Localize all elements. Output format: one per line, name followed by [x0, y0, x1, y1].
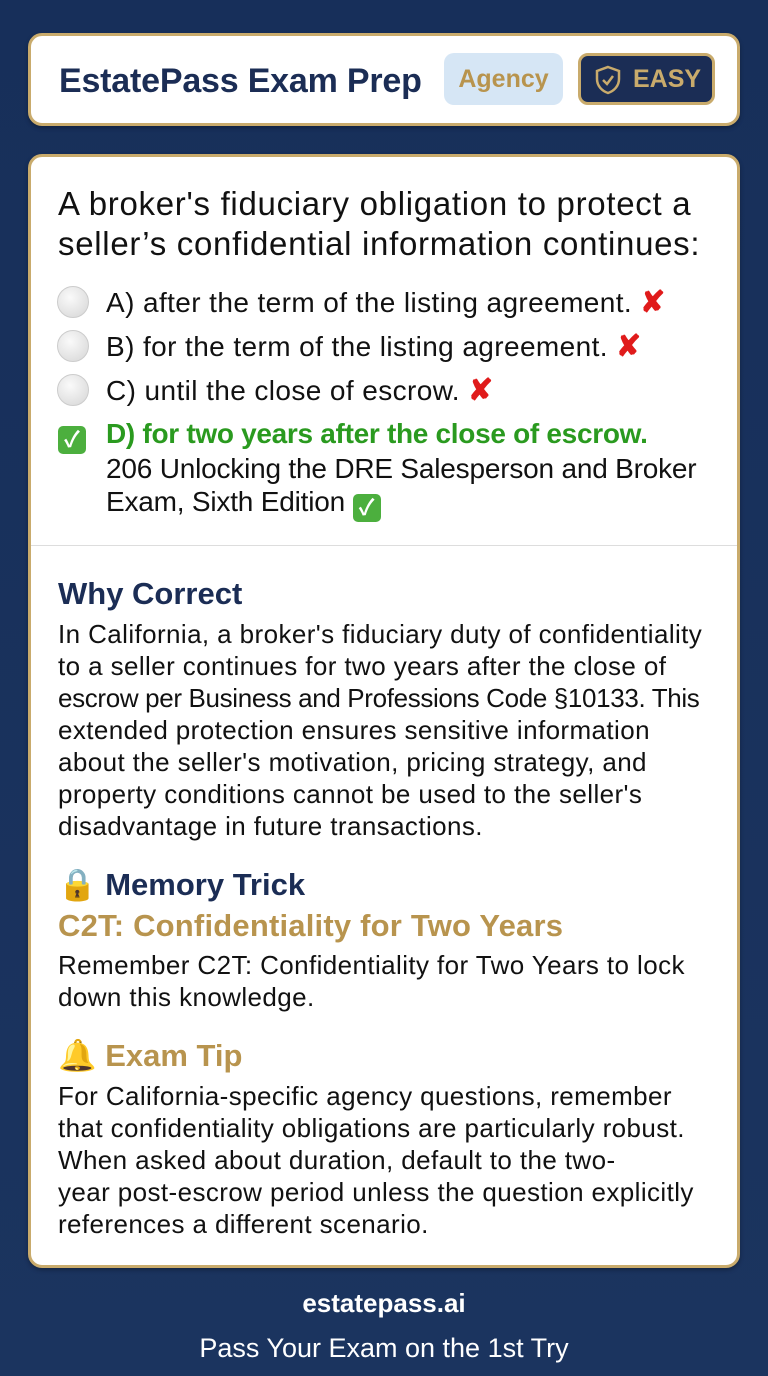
title: EstatePass Exam Prep: [59, 62, 422, 100]
text: explanation: property conditions cannot be used to the seller's: [58, 779, 642, 809]
text: memory: Remember C2T: Confidentiality for Two Years to lock: [58, 950, 685, 980]
text: explanation: about the seller's motivation, pricing strategy, and: [58, 747, 647, 777]
heading: Exam Tip: 🔔 Exam Tip: [58, 1038, 242, 1073]
text: tip: year post-escrow period unless the question explicitly: [58, 1177, 694, 1207]
source: 206 Unlocking the DRE Salesperson and Broker: [106, 453, 696, 484]
question: [58, 185, 700, 262]
heading: Memory Trick: 🔒 Memory Trick: [58, 867, 305, 902]
text: tip: For California-specific agency questions, remember: [58, 1081, 672, 1111]
divider: [31, 545, 737, 546]
option D correct: ✓: [64, 427, 80, 452]
text: tip: When asked about duration, default to the two-: [58, 1145, 616, 1175]
text: tip: references a different scenario.: [58, 1209, 429, 1239]
text: explanation: disadvantage in future transactions.: [58, 811, 483, 841]
text: explanation: extended protection ensures sensitive information: [58, 715, 650, 745]
option A: A) after the term of the listing agreement. ✘: [106, 286, 666, 319]
main card: [28, 154, 740, 1268]
text: explanation: escrow per Business and Professions Code §10133. This: [58, 683, 699, 713]
text: tip: [58, 1081, 694, 1239]
footer: [199, 1288, 569, 1363]
text: tip: that confidentiality obligations are particularly robust.: [58, 1113, 685, 1143]
text: explanation: to a seller continues for two years after the close of: [58, 651, 666, 681]
badge: Agency: Agency: [458, 65, 549, 93]
badge: Agency: [444, 53, 563, 105]
text: memory: down this knowledge.: [58, 982, 315, 1012]
source: ✓: [359, 495, 375, 520]
source: [106, 453, 696, 522]
mnemonic: C2T: Confidentiality for Two Years: [58, 908, 563, 943]
text: memory: [58, 950, 685, 1012]
footer tagline: Pass Your Exam on the 1st Try: [199, 1333, 569, 1363]
option C: C) until the close of escrow. ✘: [106, 374, 494, 407]
question: seller’s confidential information continues:: [58, 225, 700, 262]
text: explanation: [58, 619, 702, 841]
badge: EASY: EASY: [633, 65, 701, 93]
source: Exam, Sixth Edition: [106, 486, 345, 517]
icon: shield: [596, 66, 620, 94]
footer url: estatepass.ai: [302, 1288, 466, 1318]
badge: EASY: [578, 53, 715, 105]
header card: [28, 33, 740, 126]
question: A broker's fiduciary obligation to protect a: [58, 185, 691, 222]
option D correct: D) for two years after the close of escrow.: [106, 418, 648, 449]
option B: B) for the term of the listing agreement. ✘: [106, 330, 642, 363]
text: explanation: In California, a broker's fiduciary duty of confidentiality: [58, 619, 702, 649]
heading: Why Correct: Why Correct: [58, 576, 242, 611]
